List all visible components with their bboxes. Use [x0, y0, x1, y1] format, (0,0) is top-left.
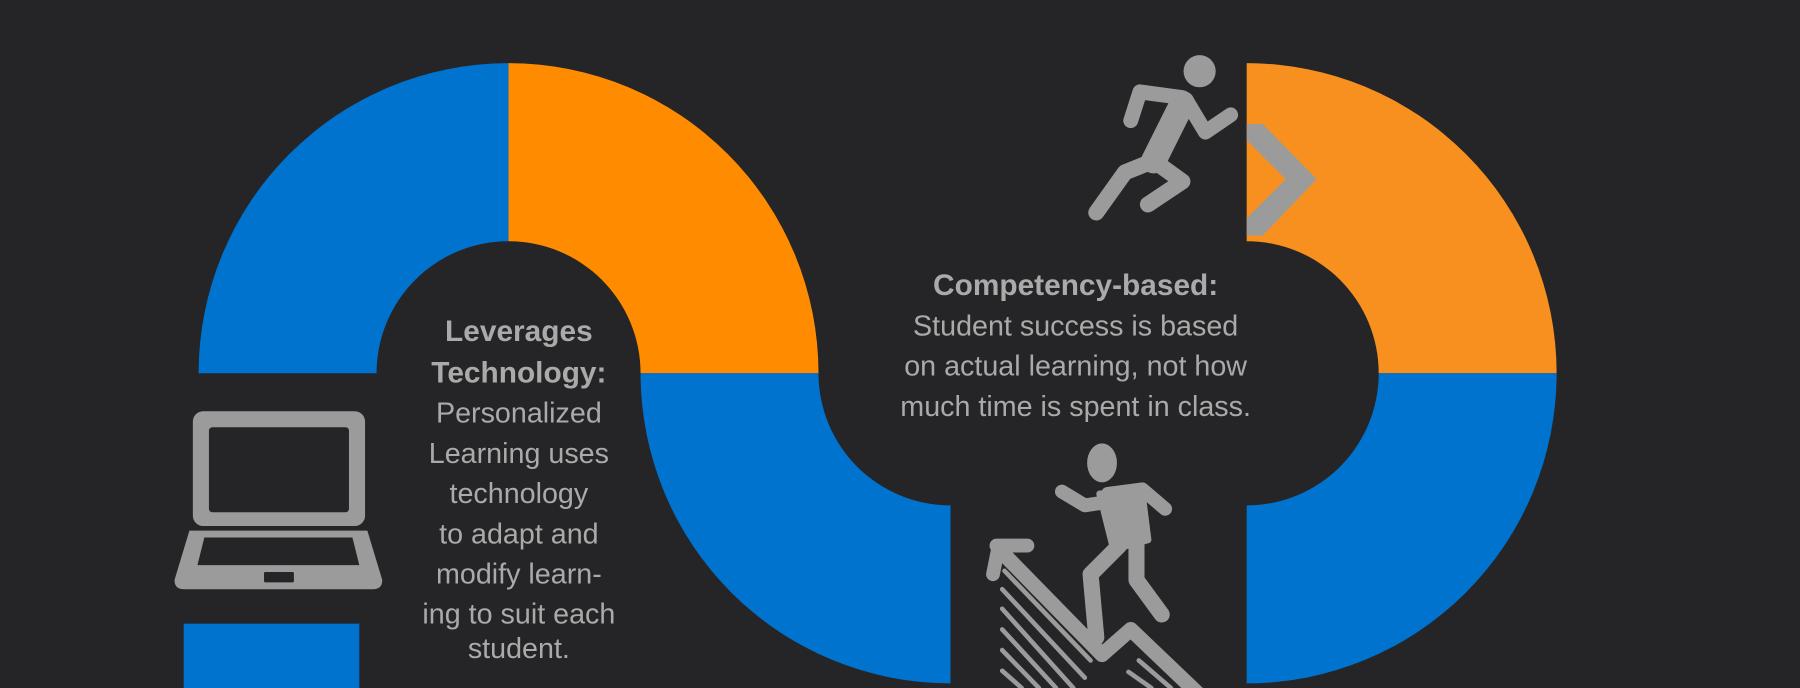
icon: laptop: [174, 411, 382, 589]
text: leverages technology: to adapt and: [439, 518, 599, 550]
text: leverages technology: student.: [468, 633, 570, 665]
text: leverages technology: modify learn-: [436, 558, 602, 590]
blue bar bottom left: [184, 624, 359, 688]
arc: right orange quadrant: [1247, 63, 1557, 373]
text: competency-based: Student success is based: [913, 310, 1238, 342]
arc: left blue quadrant: [199, 63, 509, 373]
text: leverages technology: Personalized: [436, 398, 602, 430]
text: competency-based: much time is spent in class.: [900, 391, 1251, 423]
text: leverages technology: Technology:: [431, 356, 606, 389]
text: leverages technology: Learning uses: [429, 438, 609, 470]
icon: runner: [1096, 55, 1231, 212]
text: leverages technology: technology: [450, 478, 589, 510]
text: competency-based: [900, 269, 1251, 423]
arc: left orange quadrant: [509, 63, 818, 373]
text: competency-based: Competency-based:: [933, 269, 1218, 302]
text: leverages technology: ing to suit each: [422, 599, 615, 631]
text: competency-based: on actual learning, not how: [904, 351, 1247, 383]
arc: right blue quadrant: [1247, 373, 1557, 683]
text: leverages technology: [422, 315, 615, 665]
icon: chevron: [1247, 124, 1317, 235]
icon: stair climber: [993, 443, 1205, 688]
arc: middle blue quadrant: [641, 373, 951, 683]
text: leverages technology: Leverages: [445, 315, 593, 348]
